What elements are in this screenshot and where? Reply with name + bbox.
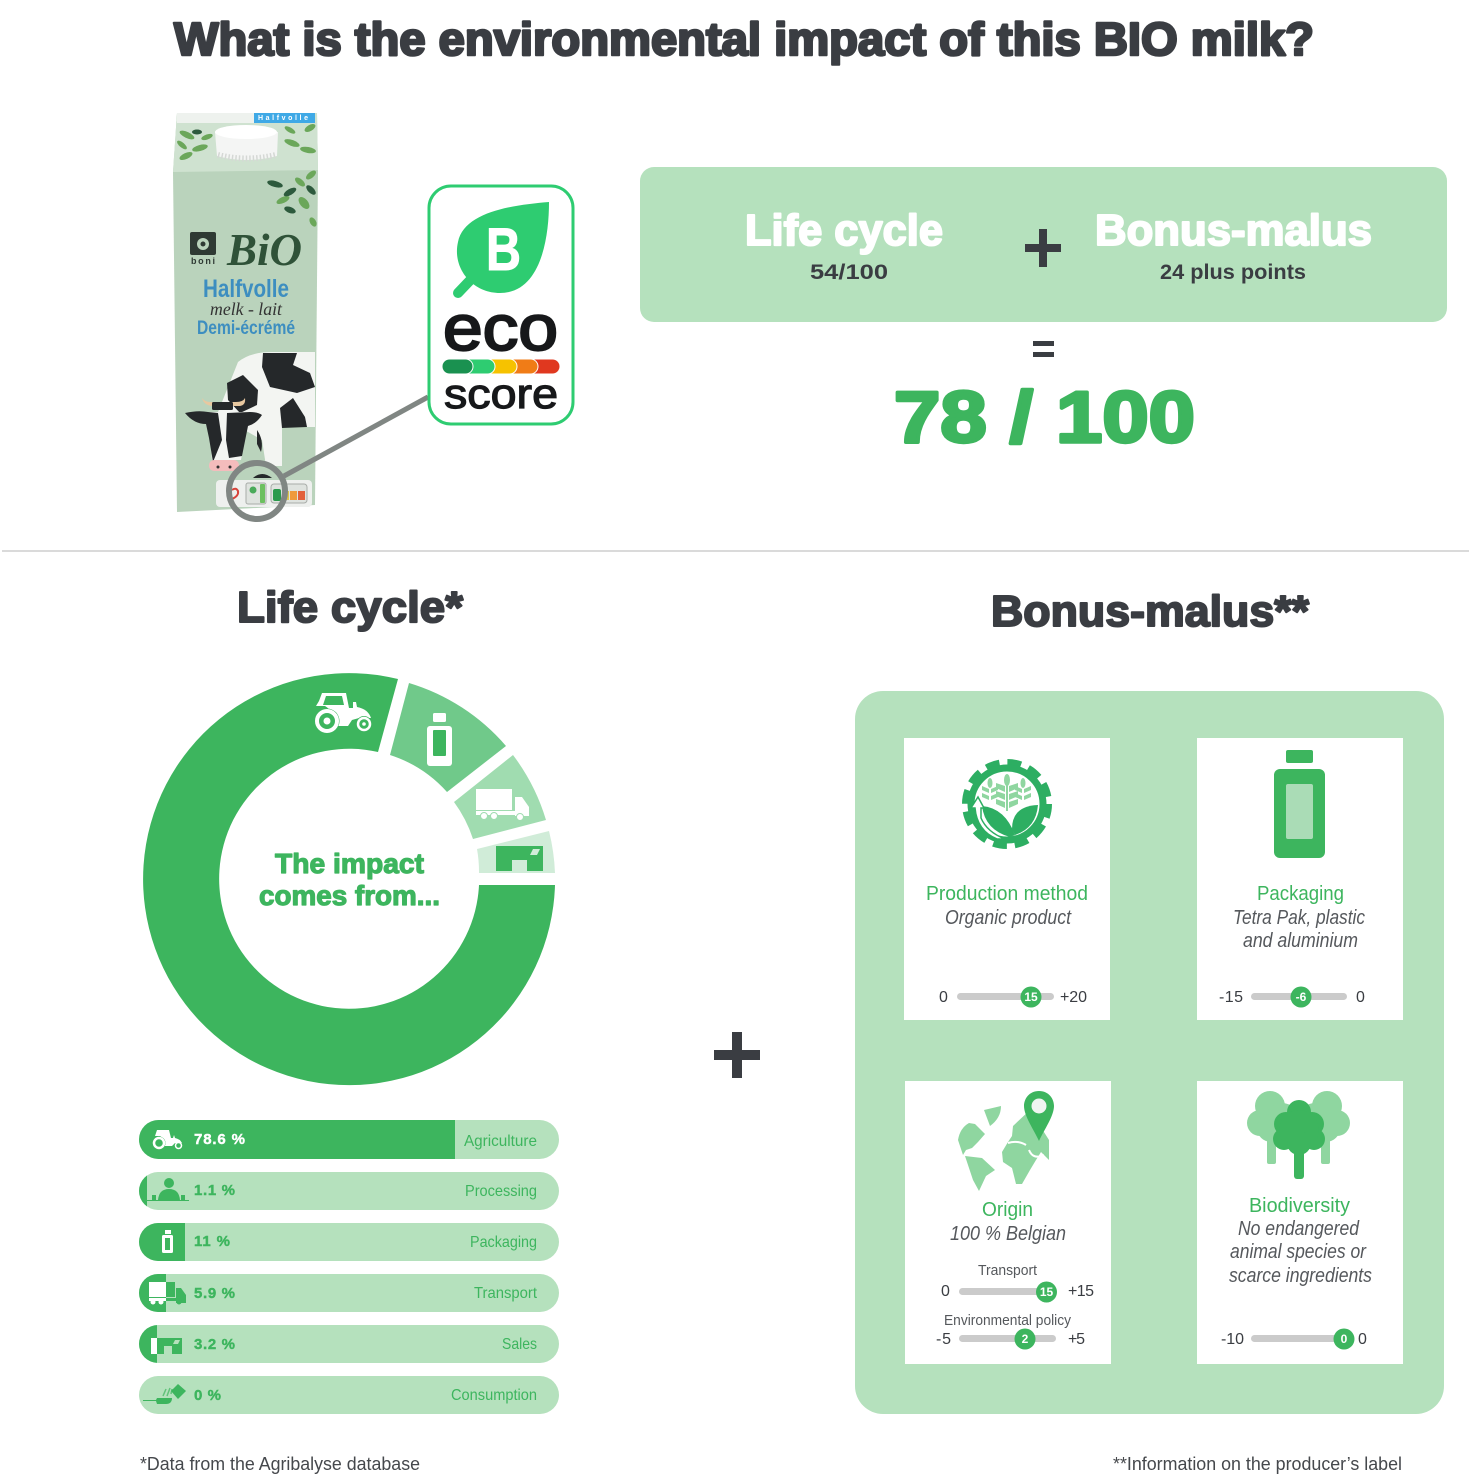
bar: sales: 3.2 % [194, 1336, 235, 1353]
card: origin: Environmental policy [944, 1312, 1071, 1329]
slider: 0 [1358, 1331, 1367, 1348]
bar: transport: Transport [474, 1285, 538, 1302]
segment: agriculture [143, 673, 555, 1085]
panel: score formula: Bonus-malus [1095, 206, 1372, 255]
slider: 0 [939, 989, 948, 1006]
icon: shop [496, 846, 543, 871]
bar: processing: Processing [465, 1183, 537, 1200]
icon: worker [147, 1178, 189, 1201]
pointer line and magnifier ring [229, 397, 428, 519]
equals sign [1033, 341, 1054, 357]
panel: score formula [640, 167, 1447, 322]
slider: 15 [1024, 990, 1038, 1004]
donut centre text: comes from... [259, 880, 440, 911]
bar: transport: 5.9 % [194, 1285, 235, 1302]
slider: +20 [1060, 989, 1087, 1006]
card: production method [904, 738, 1110, 1020]
milk carton illustration: Demi-écrémé [197, 318, 295, 339]
eco-score badge [429, 186, 573, 424]
segment: transport [454, 755, 546, 839]
grade colour bar [442, 359, 560, 374]
milk carton illustration: melk - lait [210, 299, 283, 319]
card: biodiversity: No endangered [1238, 1218, 1360, 1240]
slider: transport: +15 [1068, 1283, 1094, 1300]
slider: transport: 15 [1040, 1285, 1053, 1299]
icon: pan and food [143, 1384, 186, 1404]
card: packaging: Packaging [1257, 883, 1344, 905]
slider: environmental policy: +5 [1068, 1331, 1085, 1348]
total score: 78 / 100 [894, 378, 1195, 458]
icon: leaf with grade B: B [486, 216, 521, 283]
slider: environmental policy [936, 1328, 1085, 1350]
icon: world map with pin [958, 1091, 1054, 1191]
bar: packaging: Packaging [470, 1234, 537, 1251]
footnote: bonus-malus: **Information on the producer’s label [1113, 1454, 1402, 1474]
card: production method: Organic product [945, 907, 1072, 929]
panel: bonus-malus [855, 691, 1444, 1414]
bar: agriculture [139, 1120, 559, 1159]
card: biodiversity [1197, 1081, 1403, 1364]
icon: tractor [314, 693, 372, 734]
card: packaging: and aluminium [1243, 930, 1358, 952]
milk carton illustration: Halfvolle [258, 115, 308, 122]
slider: -15 [1219, 989, 1243, 1006]
card: origin: Transport [978, 1262, 1038, 1279]
bar: sales [139, 1325, 559, 1363]
bar: packaging: 11 % [194, 1233, 230, 1250]
slider: -10 [1221, 1331, 1244, 1348]
milk carton illustration: boni [191, 256, 215, 266]
card: origin [905, 1081, 1111, 1364]
panel: score formula: 54/100 [810, 261, 888, 284]
icon: leaf with grade B [457, 202, 549, 293]
footnote: life cycle: *Data from the Agribalyse database [140, 1454, 420, 1474]
eco-score badge: score [444, 370, 558, 417]
segment: sales [477, 831, 555, 873]
card: packaging: Tetra Pak, plastic [1233, 907, 1365, 929]
slider: environmental policy: 2 [1022, 1332, 1029, 1346]
bar: transport [139, 1274, 559, 1312]
milk carton illustration [173, 113, 318, 512]
icon: bottle [1274, 750, 1325, 858]
donut chart [143, 673, 555, 1085]
icon: shop [151, 1338, 182, 1354]
icon: organic gear [965, 762, 1049, 846]
card: origin: 100 % Belgian [950, 1223, 1066, 1245]
slider: 0 [1341, 1332, 1348, 1346]
bar: processing [139, 1172, 559, 1210]
panel: score formula: 24 plus points [1160, 261, 1306, 284]
title: What is the environmental impact of this BIO milk? [174, 13, 1314, 65]
slider: transport: 0 [941, 1283, 950, 1300]
slider [1221, 1328, 1367, 1350]
slider: environmental policy: -5 [936, 1331, 951, 1348]
icon: tractor [152, 1130, 182, 1150]
panel: score formula: Life cycle [745, 206, 943, 255]
bar: packaging [139, 1223, 559, 1261]
milk carton illustration: Halfvolle [203, 275, 289, 303]
slider: -6 [1296, 990, 1307, 1004]
card: biodiversity: animal species or [1230, 1241, 1367, 1263]
card: biodiversity: scarce ingredients [1229, 1265, 1372, 1287]
slider [939, 986, 1087, 1008]
bar: consumption: Consumption [451, 1387, 537, 1404]
icon: truck [476, 789, 529, 820]
heading: bonus-malus: Bonus-malus** [991, 587, 1310, 636]
card: production method: Production method [926, 883, 1088, 905]
heading: life cycle: Life cycle* [237, 583, 464, 632]
card: origin: Origin [982, 1199, 1033, 1221]
milk carton illustration: BiO [226, 225, 302, 275]
card: packaging [1197, 738, 1403, 1020]
bar: consumption [139, 1376, 559, 1414]
icon: bottle [427, 713, 452, 766]
donut centre text: The impact [275, 848, 424, 879]
icon: big plus [714, 1032, 760, 1078]
icon: plus [1025, 229, 1061, 267]
slider: transport [941, 1282, 1094, 1302]
bar: sales: Sales [502, 1336, 537, 1353]
eco-score badge: eco [443, 292, 558, 364]
icon: trees [1247, 1091, 1350, 1179]
bar: processing: 1.1 % [194, 1182, 235, 1199]
slider: 0 [1356, 989, 1365, 1006]
donut centre text [259, 848, 440, 911]
icon: bottle [162, 1230, 173, 1253]
card: biodiversity: Biodiversity [1249, 1195, 1350, 1217]
bar: agriculture: 78.6 % [194, 1131, 245, 1148]
bar: consumption: 0 % [194, 1387, 221, 1404]
icon: truck [149, 1282, 186, 1304]
slider [1219, 986, 1365, 1008]
segment: packaging [390, 683, 506, 792]
bar: agriculture: Agriculture [464, 1133, 537, 1150]
